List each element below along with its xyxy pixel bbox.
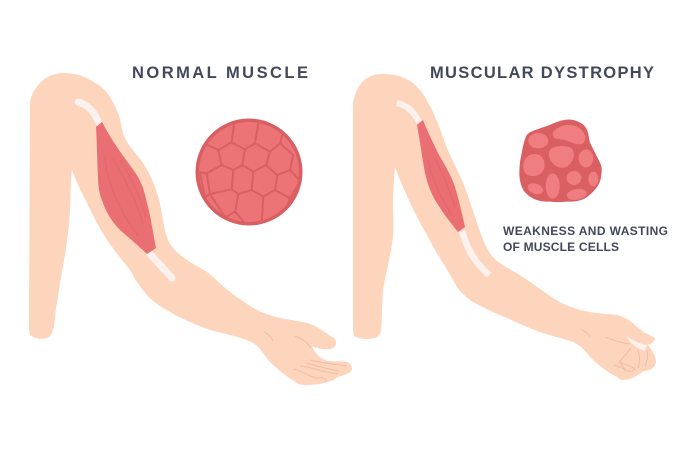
- lower tendon: [462, 231, 489, 275]
- biceps muscle: [96, 122, 156, 254]
- lower tendon: [150, 254, 172, 278]
- muscle fibre lines: [428, 158, 455, 217]
- thumb nail band: [627, 337, 647, 351]
- wasted muscle: [417, 120, 465, 232]
- arm silhouette: [29, 73, 352, 385]
- caption: OF MUSCLE CELLS: [503, 240, 619, 254]
- dystrophy arm illustration: [353, 74, 656, 380]
- arm silhouette: [353, 74, 656, 380]
- normal arm illustration: [29, 73, 352, 385]
- upper tendon: [78, 102, 99, 123]
- caption: WEAKNESS AND WASTING: [503, 224, 668, 238]
- title: muscular dystrophy: MUSCULAR DYSTROPHY: [430, 64, 654, 82]
- healthy muscle cross-section: [196, 118, 302, 226]
- muscle fibre lines: [105, 157, 146, 236]
- title: normal muscle: NORMAL MUSCLE: [132, 64, 308, 82]
- upper tendon: [397, 103, 419, 122]
- hand creases: [581, 329, 647, 372]
- hand creases: [264, 332, 347, 382]
- atrophied muscle cross-section: [519, 119, 602, 202]
